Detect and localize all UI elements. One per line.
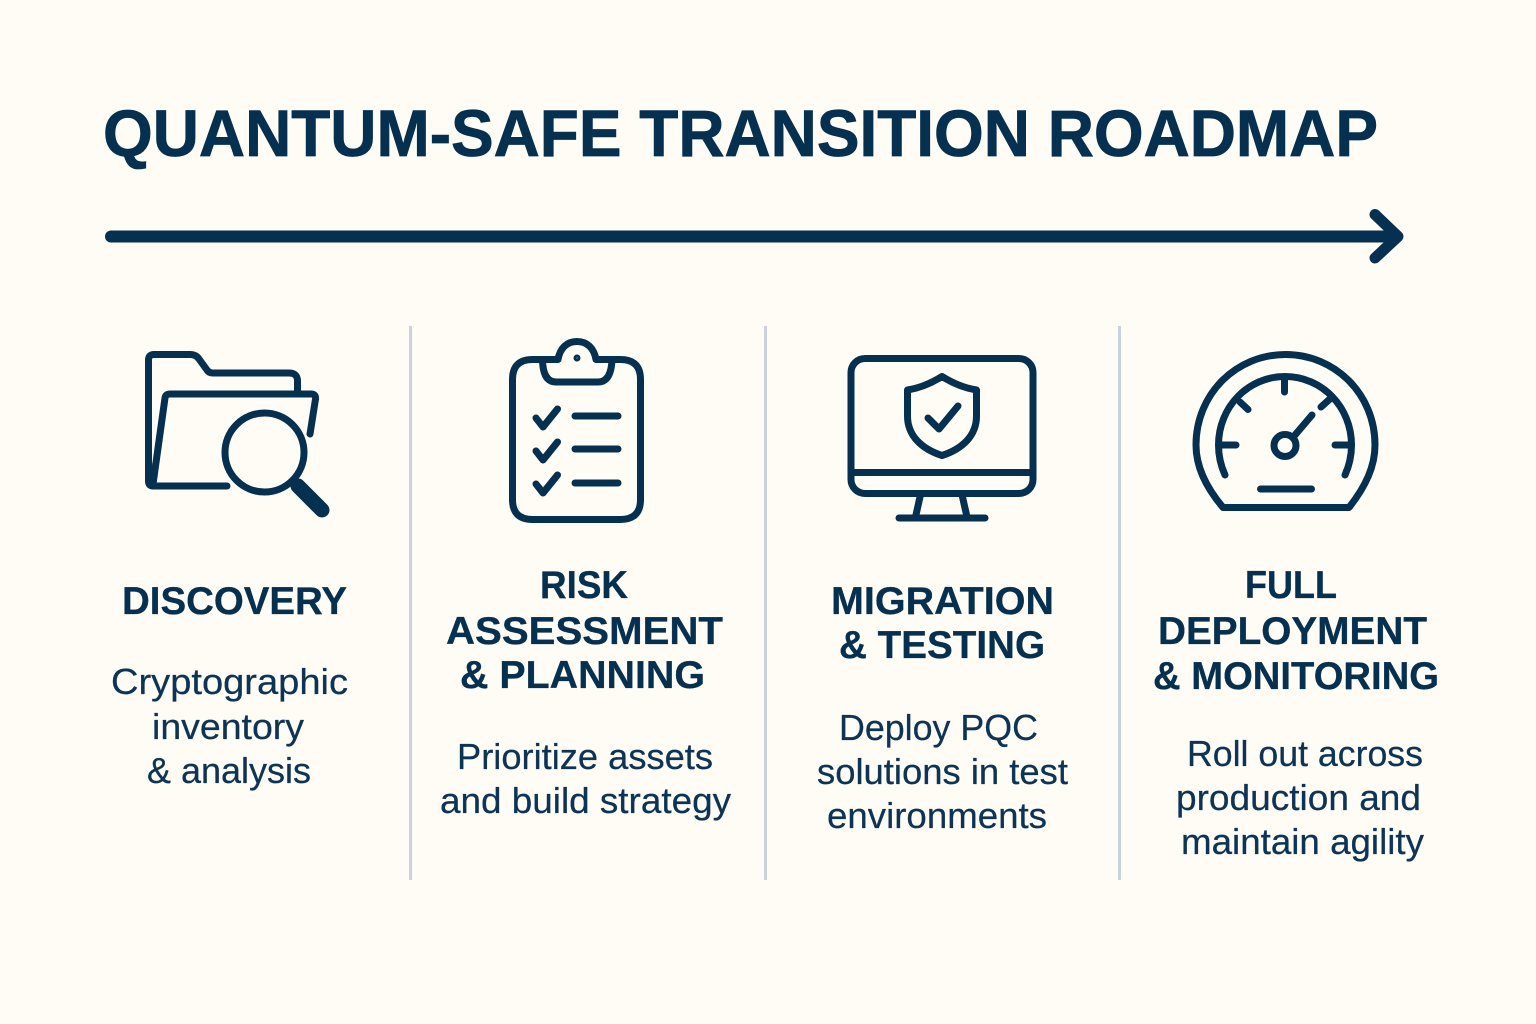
text: migration description: solutions in test — [817, 751, 1068, 792]
panel: risk assessment — [440, 342, 731, 821]
icon: speedometer gauge — [1196, 354, 1375, 508]
text: risk description: and build strategy — [440, 780, 731, 821]
text: migration description: Deploy PQC — [839, 707, 1038, 748]
panel: discovery — [111, 354, 348, 791]
icon: clipboard checklist — [512, 342, 640, 520]
text: deployment description: production and — [1176, 777, 1421, 818]
heading: risk assessment and planning: RISK — [540, 564, 628, 607]
heading: risk assessment and planning: ASSESSMENT — [446, 610, 723, 653]
icon: folder with magnifier — [148, 354, 322, 510]
heading: risk assessment and planning — [446, 564, 723, 697]
heading: migration and testing — [831, 580, 1054, 667]
text: risk description — [440, 736, 731, 821]
icon: monitor with shield — [851, 358, 1033, 518]
heading: full deployment and monitoring: & MONITORING — [1153, 655, 1439, 698]
heading: full deployment and monitoring: DEPLOYMENT — [1158, 610, 1427, 653]
heading: migration and testing: MIGRATION — [831, 580, 1054, 623]
title: QUANTUM-SAFE TRANSITION ROADMAP — [103, 96, 1378, 170]
heading: full deployment and monitoring — [1153, 564, 1439, 698]
arrow: timeline — [111, 214, 1398, 258]
text: migration description — [817, 707, 1068, 836]
text: deployment description: Roll out across — [1187, 733, 1423, 774]
text: discovery description: & analysis — [147, 750, 311, 791]
panel: migration — [817, 358, 1068, 836]
text: discovery description — [111, 661, 348, 791]
text: migration description: environments — [827, 795, 1047, 836]
heading: migration and testing: & TESTING — [839, 624, 1045, 667]
text: discovery description: inventory — [152, 706, 304, 747]
heading: discovery: DISCOVERY — [122, 580, 347, 623]
text: discovery description: Cryptographic — [111, 661, 348, 702]
text: deployment description — [1176, 733, 1424, 862]
text: risk description: Prioritize assets — [457, 736, 713, 777]
heading: risk assessment and planning: & PLANNING — [460, 654, 705, 697]
heading: full deployment and monitoring: FULL — [1245, 564, 1337, 607]
text: deployment description: maintain agility — [1181, 821, 1424, 862]
panel: full deployment — [1153, 354, 1439, 862]
